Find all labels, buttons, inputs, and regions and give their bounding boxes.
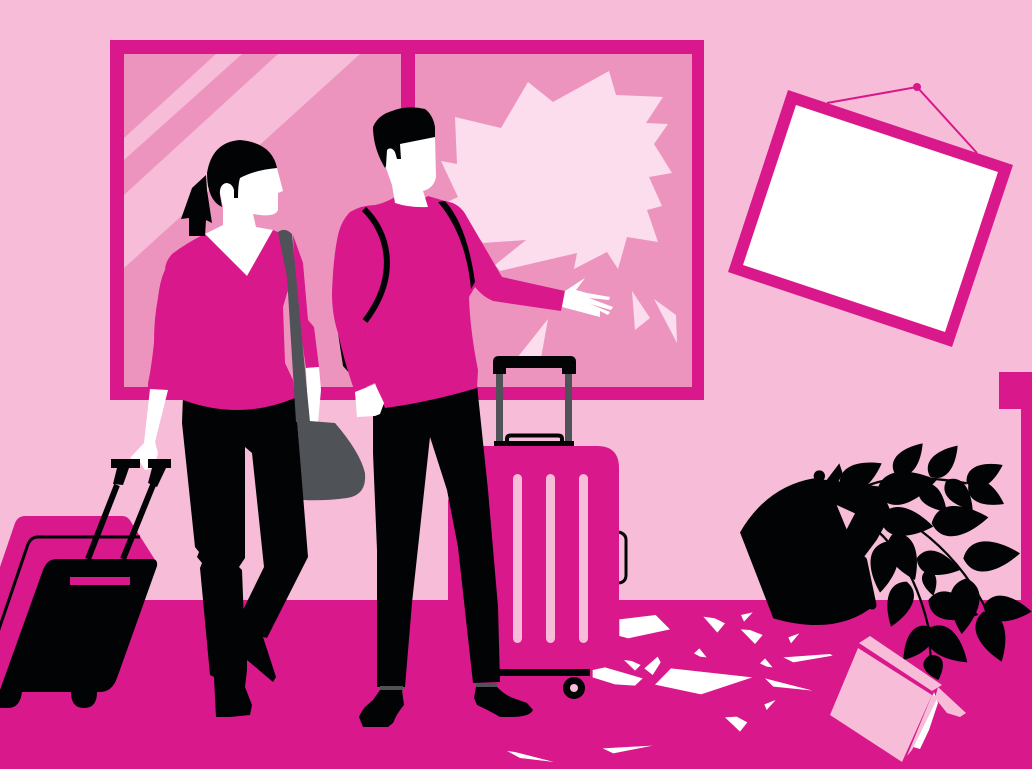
man: left shoe <box>359 690 404 727</box>
tilted picture frame <box>728 83 1013 347</box>
man: fist <box>355 384 384 417</box>
woman: trousers and boots <box>182 395 308 717</box>
man traveller <box>332 107 613 727</box>
suitcase: telescopic handle <box>88 459 171 559</box>
suitcase: label <box>70 577 130 585</box>
woman: neck and chest <box>205 205 273 276</box>
woman: far arm sleeve <box>293 235 319 368</box>
man: backpack edge <box>338 333 351 375</box>
pink upright suitcase <box>448 356 626 699</box>
glass shards on floor <box>507 612 833 762</box>
broken window <box>110 40 704 400</box>
woman: near forearm and hand <box>130 389 168 470</box>
suitcase: outer handle line <box>0 537 140 632</box>
knocked-over potted plant <box>740 436 1032 683</box>
wall fixture at right edge <box>999 372 1032 600</box>
man: hair <box>373 107 435 168</box>
suitcase: body <box>0 559 157 708</box>
man: sweater <box>332 196 565 408</box>
man: open hand <box>562 278 613 317</box>
fallen open book <box>830 636 966 762</box>
woman: ponytail <box>181 175 212 236</box>
man: ankles <box>380 683 497 691</box>
woman traveller <box>130 140 365 717</box>
floor <box>0 600 1032 769</box>
woman: hair <box>207 140 277 207</box>
man: trousers <box>373 385 500 687</box>
woman: bag strap <box>278 230 310 422</box>
woman: sweater <box>148 230 295 410</box>
woman: face <box>215 160 283 215</box>
woman: shoulder bag <box>297 420 365 500</box>
man: backpack straps <box>358 201 475 363</box>
man: right shoe <box>474 687 533 717</box>
suitcase: magenta back panel <box>0 516 157 600</box>
wheeled black suitcase <box>0 459 171 708</box>
woman: far wrist <box>306 367 321 422</box>
man: neck and face <box>385 135 436 207</box>
